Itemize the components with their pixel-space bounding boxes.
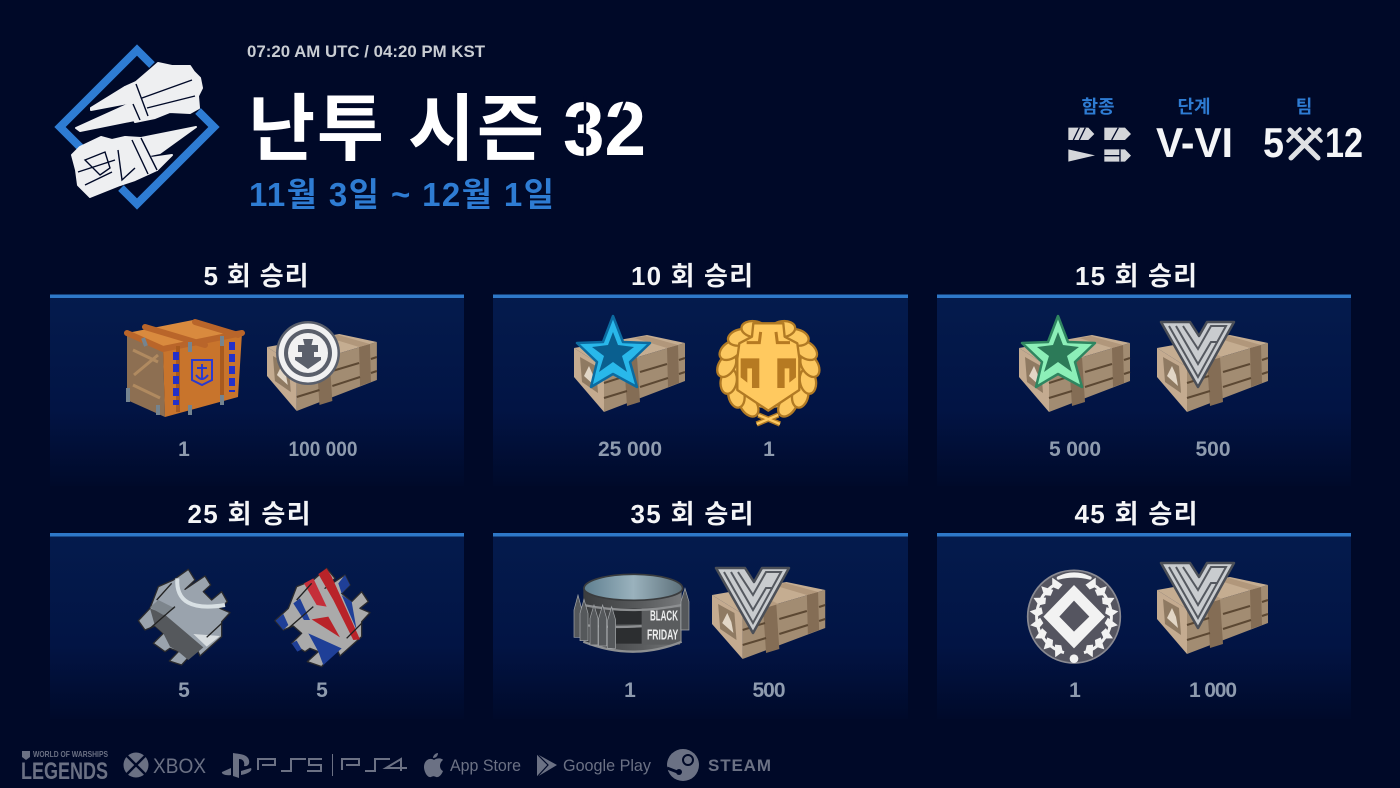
logo: App Store bbox=[424, 753, 521, 777]
panel: 35 wins bbox=[493, 499, 908, 719]
time line: 07:20 AM UTC / 04:20 PM KST bbox=[247, 42, 486, 61]
icon: green star crate bbox=[1019, 316, 1130, 412]
panel background bbox=[493, 534, 908, 719]
panel: 5 wins bbox=[50, 261, 464, 486]
heading: 45 회 승리 bbox=[1074, 499, 1198, 529]
title: 난투 시즌 bbox=[248, 89, 544, 170]
footer: platform logos bbox=[21, 749, 772, 785]
panel background bbox=[937, 534, 1351, 719]
logo: armoured fists in diamond bbox=[60, 50, 214, 204]
logo: World of Warships Legends bbox=[21, 750, 109, 785]
logo: Xbox: XBOX bbox=[153, 755, 206, 778]
logo: World of Warships Legends: LEGENDS bbox=[21, 758, 108, 785]
heading: 15 회 승리 bbox=[1075, 261, 1197, 291]
value: 1 bbox=[624, 679, 636, 702]
battle info: ship types, tiers, team bbox=[1068, 97, 1363, 166]
panel: 10 wins bbox=[493, 261, 908, 486]
logo: Xbox bbox=[124, 752, 206, 778]
heading: 5 회 승리 bbox=[204, 261, 308, 291]
title: 32 bbox=[563, 87, 646, 172]
icon: silver V crate bbox=[712, 568, 825, 659]
icon: blue star crate bbox=[574, 316, 685, 412]
value: 1 bbox=[178, 438, 190, 461]
icon: gold medal bbox=[712, 312, 825, 424]
value: 100 000 bbox=[288, 438, 358, 461]
heading: 35 회 승리 bbox=[630, 499, 754, 529]
value: 1 000 bbox=[1189, 679, 1237, 702]
icon: ship classes bbox=[1068, 128, 1131, 162]
icon: union jack camouflage patch bbox=[275, 568, 370, 667]
value: 25 000 bbox=[598, 438, 662, 461]
icon: diamond laurel emblem bbox=[1028, 570, 1120, 663]
icon: Black Friday drum container bbox=[574, 574, 689, 652]
logo: Steam bbox=[667, 749, 772, 781]
value: 1 bbox=[1069, 679, 1081, 702]
value: 5 000 bbox=[1049, 438, 1101, 461]
icon: credits crate bbox=[267, 321, 377, 411]
value: 5 bbox=[178, 679, 190, 702]
panel: 25 wins bbox=[50, 499, 464, 719]
panel: 15 wins bbox=[937, 261, 1351, 486]
icon: silver V crate bbox=[1157, 322, 1268, 412]
panel background bbox=[50, 534, 464, 719]
value: 1 bbox=[763, 438, 775, 461]
heading: 25 회 승리 bbox=[188, 499, 310, 529]
logo: World of Warships Legends: WORLD OF WARSHIPS bbox=[33, 750, 109, 759]
team value left: 5 bbox=[1263, 119, 1284, 166]
panel background bbox=[50, 296, 464, 486]
logo: Google Play: Google Play bbox=[563, 756, 651, 775]
panel: 45 wins bbox=[937, 499, 1351, 719]
logo: Google Play bbox=[537, 754, 651, 777]
label: ship type: 함종 bbox=[1081, 97, 1115, 117]
icon: silver V crate bbox=[1157, 563, 1268, 654]
logo: PlayStation 5 and 4 bbox=[222, 753, 407, 778]
label: team: 팀 bbox=[1296, 97, 1312, 117]
logo: Steam: STEAM bbox=[708, 756, 772, 775]
panel background bbox=[937, 296, 1351, 486]
icon: crossed swords bbox=[1288, 129, 1321, 158]
logo: App Store: App Store bbox=[450, 756, 521, 775]
icon: orange container bbox=[127, 320, 242, 417]
value: 500 bbox=[752, 679, 786, 702]
tier value: V-VI bbox=[1156, 119, 1233, 166]
icon: grey camouflage patch bbox=[138, 569, 230, 665]
value: 500 bbox=[1196, 438, 1230, 461]
heading: 10 회 승리 bbox=[631, 261, 753, 291]
panel background bbox=[493, 296, 908, 486]
label: tier: 단계 bbox=[1177, 97, 1211, 117]
drum label: FRIDAY bbox=[647, 627, 678, 643]
team value right: 12 bbox=[1325, 119, 1363, 166]
value: 5 bbox=[316, 679, 328, 702]
drum label: BLACK bbox=[650, 609, 678, 625]
date range: 11월 3일 ~ 12월 1일 bbox=[249, 176, 554, 213]
